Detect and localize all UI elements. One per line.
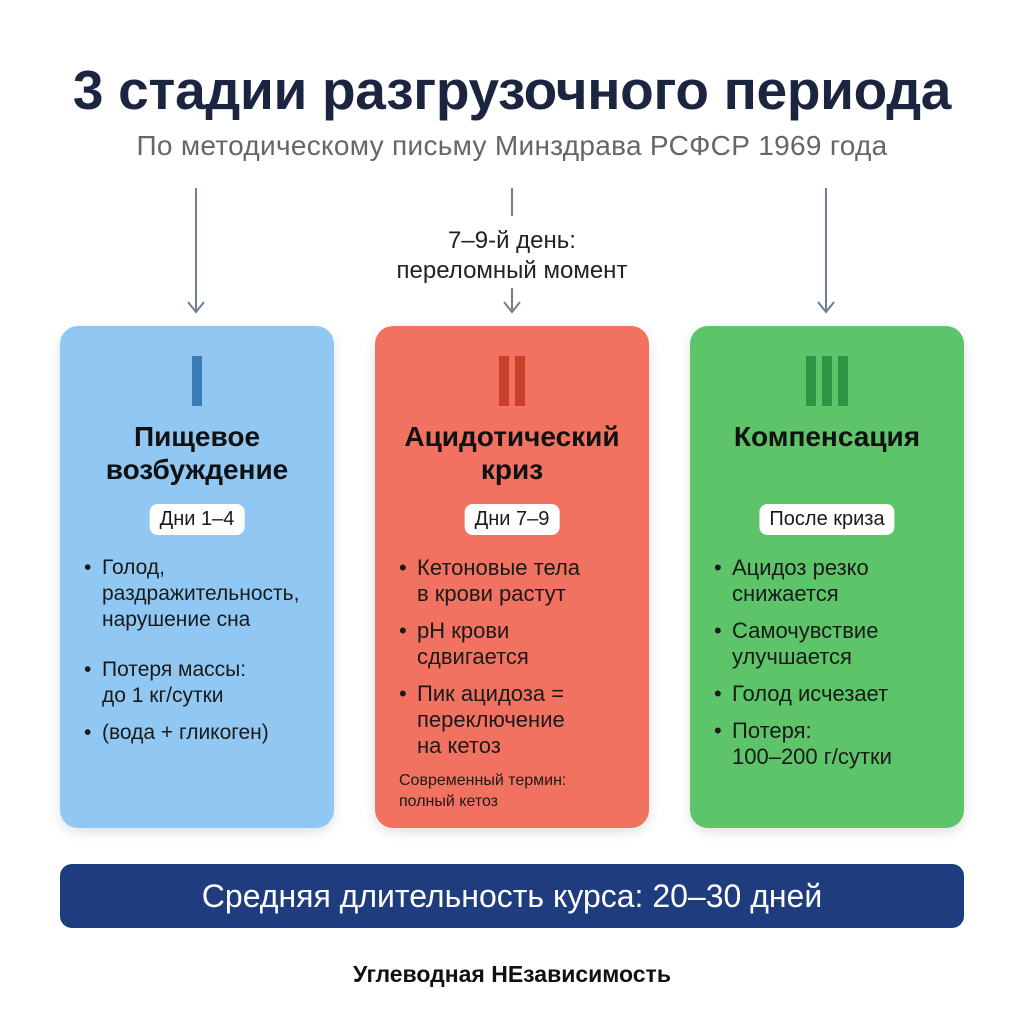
pill: Дни 7–9 [475, 508, 549, 530]
bullets: раздражительность, [102, 582, 299, 605]
bullets: на кетоз [417, 733, 501, 758]
heading: Ацидотический [404, 421, 620, 452]
bullets: Кетоновые тела [417, 555, 580, 580]
note: Современный термин: [399, 772, 566, 789]
bullets: (вода + гликоген) [102, 721, 269, 744]
arrow: middle [503, 188, 521, 314]
numeral I [192, 356, 202, 406]
heading: возбуждение [106, 454, 288, 485]
pill [465, 504, 559, 535]
bullets: сдвигается [417, 644, 529, 669]
note: полный кетоз [399, 793, 498, 810]
heading: Компенсация [734, 421, 920, 452]
bullets: Потеря: [732, 718, 812, 743]
bullets: Самочувствие [732, 618, 878, 643]
title: 3 стадии разгрузочного периода [73, 59, 951, 121]
heading [106, 421, 288, 485]
bullets [714, 555, 892, 769]
bullets: снижается [732, 581, 839, 606]
heading: криз [481, 454, 543, 485]
heading [404, 421, 620, 485]
bullets: до 1 кг/сутки [102, 684, 224, 707]
bullets: нарушение сна [102, 608, 250, 631]
callout: turning point [397, 227, 628, 284]
callout: turning point: 7–9-й день: [448, 227, 576, 254]
bullets [400, 555, 580, 758]
subtitle: По методическому письму Минздрава РСФСР 1969 года [136, 130, 888, 161]
bullets: улучшается [732, 644, 852, 669]
numeral III [806, 356, 848, 406]
numeral II [499, 356, 525, 406]
bullets: pH крови [417, 618, 509, 643]
bullets: 100–200 г/сутки [732, 744, 892, 769]
callout: turning point: переломный момент [397, 257, 627, 284]
panel: stage III [690, 326, 964, 828]
arrow: left [187, 188, 205, 314]
bottom bar [60, 864, 964, 928]
footer brand: Углеводная НЕзависимость [353, 961, 671, 987]
panel: stage II [375, 326, 649, 828]
note [399, 772, 566, 810]
pill [150, 504, 244, 535]
arrow: right [817, 188, 835, 314]
bullets: переключение [417, 707, 565, 732]
pill: Дни 1–4 [160, 508, 234, 530]
bullets: Ацидоз резко [732, 555, 869, 580]
panel: stage I [60, 326, 334, 828]
bullets: Голод исчезает [732, 681, 888, 706]
bottom bar: Средняя длительность курса: 20–30 дней [202, 878, 822, 914]
bullets: в крови растут [417, 581, 566, 606]
bullets: Пик ацидоза = [417, 681, 564, 706]
pill [759, 504, 895, 535]
bullets: Голод, [102, 556, 165, 579]
bullets [84, 556, 299, 744]
pill: После криза [769, 508, 885, 530]
bullets: Потеря массы: [102, 658, 246, 681]
heading: Пищевое [134, 421, 260, 452]
